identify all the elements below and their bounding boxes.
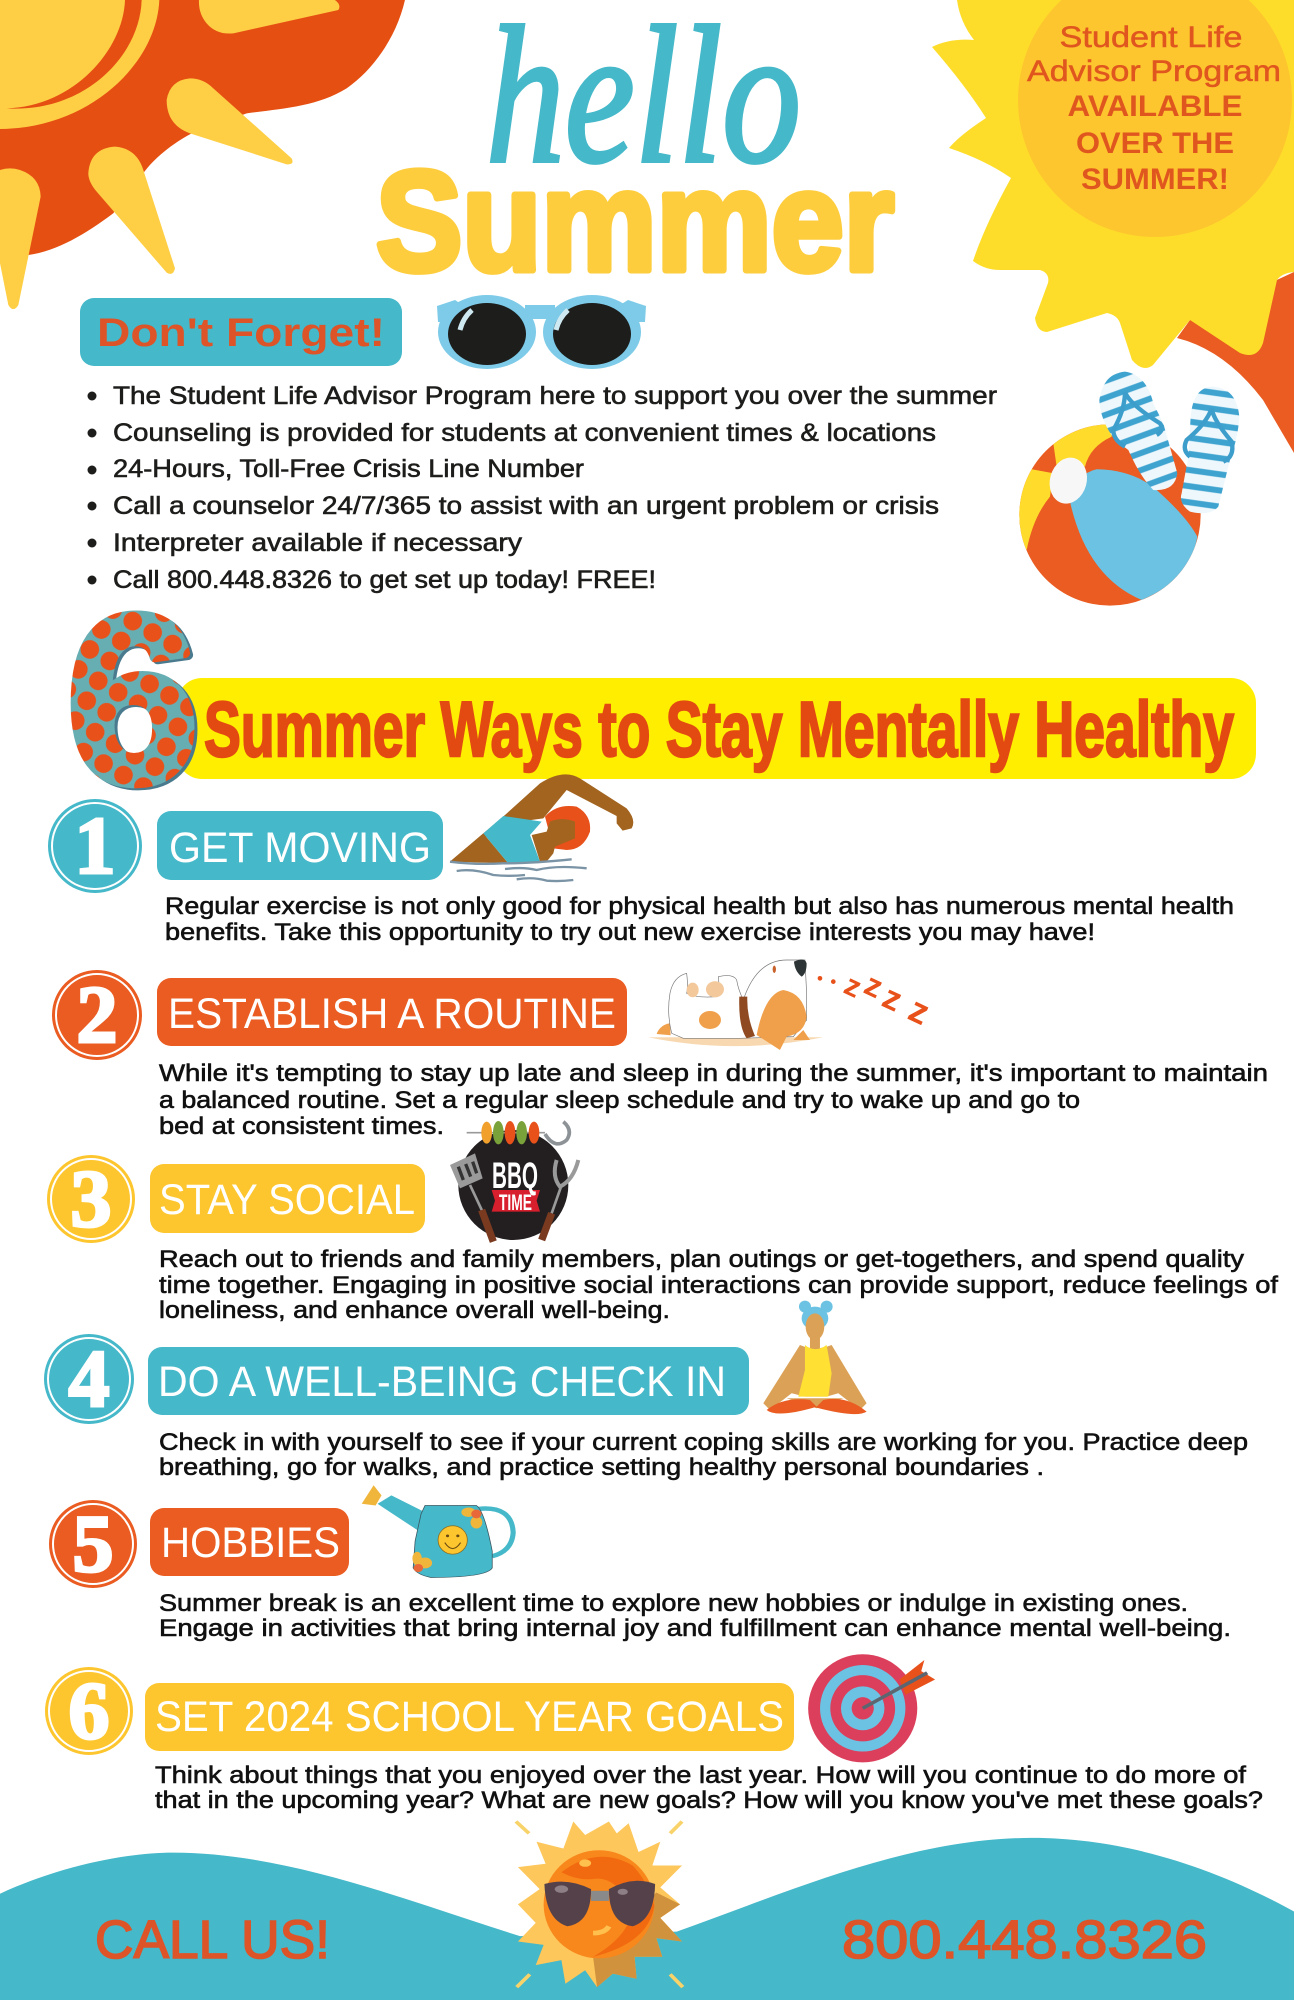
bullet list: Call a counselor 24/7/365 to assist with an urgent problem or crisis: [113, 492, 939, 520]
text: student life advisor program available: [1027, 21, 1281, 196]
icon: sleeping dog: z: [877, 978, 908, 1019]
step 5: hobbies: HOBBIES: [161, 1519, 340, 1567]
step 3: stay social: STAY SOCIAL: [159, 1176, 415, 1224]
icon: sleeping dog: z: [839, 968, 867, 1005]
text: student life advisor program available: AVAILABLE: [1068, 90, 1242, 123]
bullet list: 24-Hours, Toll-Free Crisis Line Number: [113, 455, 584, 483]
text: step 1 body: Regular exercise is not only good for physical health but also has numerous mental health: [165, 893, 1234, 920]
text: step 4 body: breathing, go for walks, and practice setting healthy personal boundaries .: [159, 1454, 1044, 1481]
icon: sunglasses: [437, 295, 646, 369]
step 2: establish a routine: ESTABLISH A ROUTINE: [168, 990, 616, 1038]
text: student life advisor program available: Student Life: [1060, 21, 1242, 54]
step 1: get moving: GET MOVING: [169, 824, 431, 872]
text: step 4 body: [159, 1429, 1248, 1481]
icon: big number 6: 6: [70, 569, 201, 834]
icon: sleeping dog: z: [903, 988, 936, 1033]
text: step 2 body: bed at consistent times.: [159, 1113, 444, 1140]
text: step 5 body: Summer break is an excellent time to explore new hobbies or indulge in existing ones.: [159, 1590, 1188, 1617]
icon: bbq time: [450, 1121, 578, 1242]
step 4: well-being check in: 4: [68, 1333, 110, 1424]
step 5: hobbies: 5: [72, 1498, 114, 1589]
step 6: school year goals: SET 2024 SCHOOL YEAR GOALS: [155, 1693, 784, 1741]
bullet list: [88, 382, 997, 594]
text: step 1 body: [165, 893, 1234, 946]
icon: sun with sunglasses: [516, 1822, 683, 1987]
step 1: get moving: [48, 799, 443, 893]
text: step 6 body: that in the upcoming year? What are new goals? How will you know you've met these goals?: [155, 1787, 1263, 1814]
step 3: stay social: 3: [70, 1153, 112, 1244]
icon: yellow sun top right: [932, 0, 1294, 453]
text: step 3 body: [159, 1246, 1278, 1324]
heading: Don't Forget: [80, 298, 402, 366]
icon: swimmer: [450, 774, 633, 881]
heading: Don't Forget: Don't Forget!: [97, 311, 385, 355]
step 1: get moving: 1: [74, 800, 116, 891]
icon: bbq time: BBQ: [492, 1155, 538, 1196]
text: step 3 body: loneliness, and enhance overall well-being.: [159, 1297, 670, 1324]
icon: sleeping dog: [648, 960, 936, 1050]
text: step 4 body: Check in with yourself to see if your current coping skills are working for you. Practice deep: [159, 1429, 1248, 1456]
step 3: stay social: [47, 1153, 425, 1244]
title: Summer: Summer: [376, 142, 894, 301]
text: step 3 body: time together. Engaging in positive social interactions can provide support, reduce feelings of: [159, 1272, 1278, 1299]
icon: watering can: [362, 1485, 513, 1577]
step 6: school year goals: [45, 1665, 794, 1756]
text: step 6 body: Think about things that you enjoyed over the last year. How will you continue to do more of: [155, 1762, 1246, 1789]
step 2: establish a routine: 2: [76, 969, 118, 1060]
text: step 2 body: [159, 1060, 1268, 1140]
step 4: well-being check in: [44, 1333, 749, 1424]
text: step 5 body: Engage in activities that bring internal joy and fulfillment can enhance mental well-being.: [159, 1615, 1231, 1642]
bullet list: Counseling is provided for students at convenient times & locations: [113, 419, 936, 447]
step 2: establish a routine: [52, 969, 627, 1060]
icon: bbq time: TIME: [499, 1190, 532, 1215]
icon: big number 6: 6: [67, 567, 198, 832]
icon: yoga figure: [763, 1301, 867, 1414]
bullet list: The Student Life Advisor Program here to support you over the summer: [113, 382, 997, 410]
step 5: hobbies: [49, 1498, 349, 1589]
icon: beach ball: [1013, 423, 1201, 606]
text: phone number: 800.448.8326: [842, 1910, 1207, 1970]
text: student life advisor program available: Advisor Program: [1027, 55, 1281, 88]
text: call us: CALL US!: [95, 1910, 330, 1970]
text: step 3 body: Reach out to friends and family members, plan outings or get-togethers, and spend quality: [159, 1246, 1244, 1273]
text: step 6 body: [155, 1762, 1263, 1814]
icon: target and arrow: [808, 1654, 935, 1762]
text: step 1 body: benefits. Take this opportunity to try out new exercise interests you may have!: [165, 919, 1095, 946]
text: student life advisor program available: OVER THE: [1076, 127, 1234, 160]
icon: flip flops: [1099, 372, 1239, 513]
bullet list: Interpreter available if necessary: [113, 529, 523, 557]
icon: sleeping dog: z: [859, 966, 889, 1005]
footer wave: [0, 1838, 1294, 2000]
step 6: school year goals: 6: [68, 1665, 110, 1756]
step 4: well-being check in: DO A WELL-BEING CHECK IN: [158, 1358, 726, 1406]
text: step 5 body: [159, 1590, 1231, 1642]
text: student life advisor program available: SUMMER!: [1081, 163, 1229, 196]
bullet list: Call 800.448.8326 to get set up today! FREE!: [113, 566, 656, 594]
icon: orange sun top left: [0, 0, 405, 309]
text: step 2 body: a balanced routine. Set a regular sleep schedule and try to wake up and go to: [159, 1087, 1080, 1114]
text: step 2 body: While it's tempting to stay up late and sleep in during the summer, it's important to maintain: [159, 1060, 1268, 1087]
